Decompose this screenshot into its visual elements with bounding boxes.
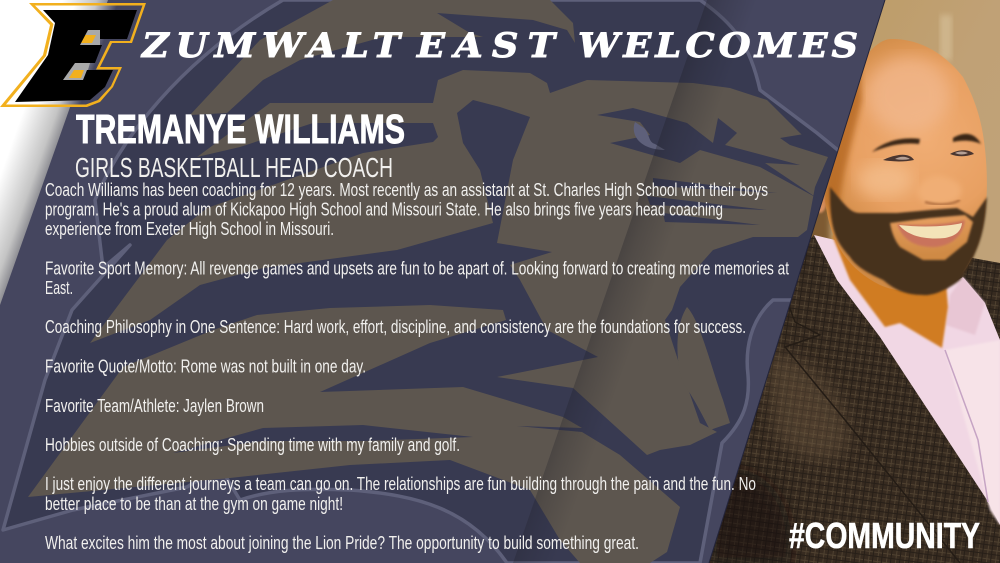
- eyes: [883, 150, 974, 162]
- logo black letter E: [15, 10, 137, 102]
- biography text: Coaching Philosophy in One Sentence: Hard work, effort, discipline, and consistency are the foundations for success.: [45, 317, 746, 337]
- biography text: better place to be than at the gym on game night!: [45, 494, 343, 514]
- biography text: Hobbies outside of Coaching: Spending time with my family and golf.: [45, 435, 460, 455]
- biography text: [45, 180, 789, 553]
- nose: [919, 178, 960, 203]
- logo inner notches: [63, 30, 100, 80]
- heading: Zumwalt East Welcomes: EAST: [416, 26, 558, 66]
- heading: Zumwalt East Welcomes: WELCOMES: [578, 26, 858, 66]
- cheek highlight: [857, 162, 913, 198]
- head left shadow: [825, 67, 862, 225]
- head: [825, 39, 987, 292]
- lion dark stripes: [173, 108, 828, 453]
- photo: coach portrait: [700, 0, 1000, 563]
- lion eye highlight: [634, 122, 665, 150]
- shadow near ear: [811, 206, 833, 240]
- nostril shadow: [925, 200, 960, 204]
- biography text: I just enjoy the different journeys a team can go on. The relationships are fun building through the pain and the fun. No: [45, 474, 756, 494]
- heading: Zumwalt East Welcomes: ZUMWALT: [140, 26, 403, 66]
- ear: [819, 194, 826, 214]
- lion mane and head tan shapes: [28, 0, 828, 563]
- jacket: [700, 235, 1000, 563]
- lion cheek oval: [677, 307, 730, 430]
- biography text: East.: [45, 278, 73, 298]
- beard: [830, 187, 987, 295]
- head highlight: [866, 57, 950, 133]
- panel edge line: [709, 0, 885, 563]
- biography text: Favorite Sport Memory: All revenge games and upsets are fun to be apart of. Looking forward to creating more memories at: [45, 258, 789, 278]
- logo: Zumwalt East E: [0, 3, 146, 107]
- biography text: What excites him the most about joining the Lion Pride? The opportunity to build something great.: [45, 533, 639, 553]
- role: GIRLS BASKETBALL HEAD COACH: [75, 152, 393, 183]
- neck: [832, 235, 948, 348]
- shirt: [814, 235, 1000, 525]
- biography text: program. He's a proud alum of Kickapoo High School and Missouri State. He also brings five years head coaching: [45, 200, 723, 220]
- biography text: Favorite Team/Athlete: Jaylen Brown: [45, 396, 264, 416]
- name: TREMANYE WILLIAMS: [76, 106, 405, 152]
- paper fold shading: [513, 0, 734, 563]
- mouth and teeth: [897, 220, 965, 247]
- biography text: Coach Williams has been coaching for 12 years. Most recently as an assistant at St. Charles High School with their boys: [45, 180, 768, 200]
- wall lighter patch: [940, 15, 952, 60]
- biography text: experience from Exeter High School in Missouri.: [45, 219, 334, 239]
- biography text: Favorite Quote/Motto: Rome was not built in one day.: [45, 356, 366, 376]
- eyebrows: [872, 134, 981, 152]
- wall: [826, 0, 1000, 263]
- heading: Zumwalt East Welcomes: [140, 26, 858, 66]
